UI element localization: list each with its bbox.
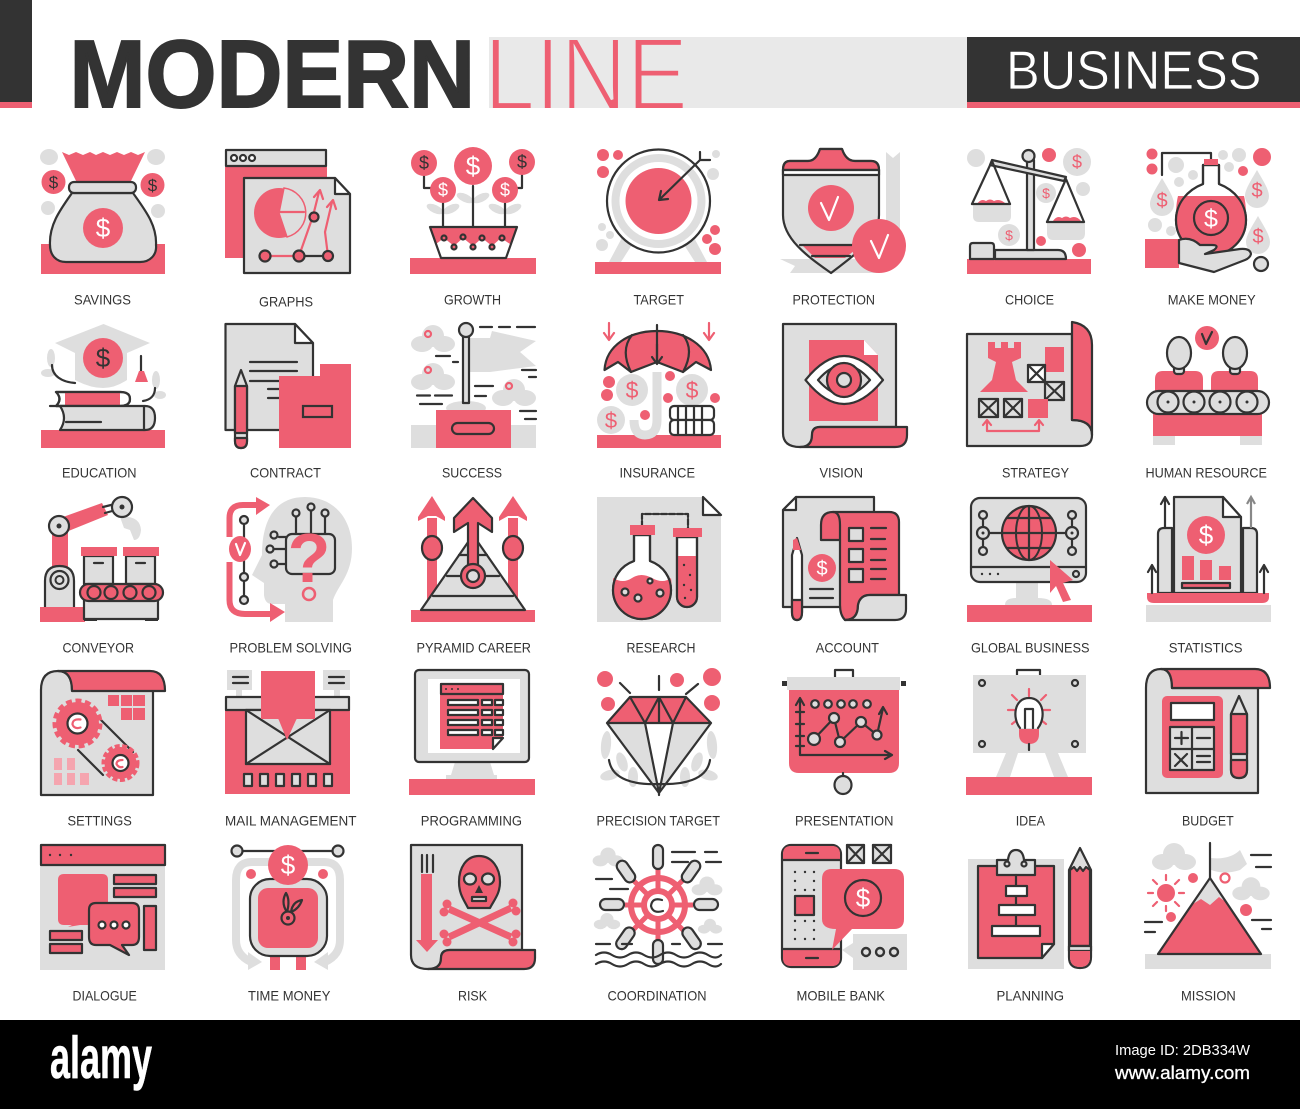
business tag: BUSINESS <box>1006 39 1262 101</box>
icon: phone with bubble: $ <box>856 883 871 913</box>
icon: flask with money: $ <box>1252 226 1264 248</box>
icon: money bag: $ <box>148 176 158 195</box>
icon: ledger and scroll <box>783 497 906 620</box>
icon: report with arrows: $ <box>1199 520 1214 550</box>
icon: umbrella and coins <box>597 323 721 448</box>
icon: umbrella and coins: $ <box>605 408 617 433</box>
icon: flask with money: $ <box>1156 190 1168 212</box>
panel: growth <box>410 147 536 307</box>
panel: human resource <box>1146 326 1269 480</box>
label: choice: CHOICE <box>1005 291 1054 307</box>
label: education: EDUCATION <box>62 464 136 480</box>
label: human resource: HUMAN RESOURCE <box>1146 464 1267 480</box>
icon: robot arm and conveyor <box>40 497 163 622</box>
icon: diamond <box>597 668 721 795</box>
icon: flag on box <box>411 323 536 448</box>
panel: mobile bank <box>782 845 907 1003</box>
label: growth: GROWTH <box>444 291 501 307</box>
label: account: ACCOUNT <box>816 639 879 655</box>
icon: flasks <box>597 497 721 622</box>
icon: report with arrows <box>1146 497 1271 622</box>
label: precision target: PRECISION TARGET <box>596 812 720 828</box>
label: mission: MISSION <box>1181 987 1236 1003</box>
icon: gears on scroll <box>41 671 165 795</box>
icon: clock with dollar: $ <box>281 850 296 880</box>
icon: head with question mark: ? <box>288 519 330 597</box>
icon: graduation cap on books <box>41 324 166 448</box>
panel: presentation <box>782 670 906 828</box>
panel: pyramid career <box>411 496 535 655</box>
icon: eye on scroll <box>783 324 907 447</box>
icon: mountain flag <box>1145 843 1271 969</box>
label: savings: SAVINGS <box>74 291 131 307</box>
icon: envelope <box>225 670 350 794</box>
label: programming: PROGRAMMING <box>421 812 522 828</box>
label: time money: TIME MONEY <box>248 987 331 1003</box>
icon: monitor with code sheet <box>409 670 535 795</box>
panel: target <box>595 149 721 307</box>
title: modern: MODERN <box>70 21 475 128</box>
panel: coordination <box>593 845 722 1003</box>
icon: ledger and scroll: $ <box>816 558 828 580</box>
icon: balance scales <box>967 148 1091 274</box>
label: strategy: STRATEGY <box>1002 464 1070 480</box>
panel: contract <box>226 324 351 480</box>
title: line: LINE <box>484 16 688 132</box>
icon: chess map <box>967 322 1092 446</box>
icon: phone with bubble <box>782 845 907 970</box>
icon: light bulb board <box>966 670 1092 795</box>
icon: money plant: $ <box>500 180 510 200</box>
panel: mail management <box>225 670 357 828</box>
icon: umbrella and coins: $ <box>686 377 699 403</box>
label: pyramid career: PYRAMID CAREER <box>416 639 531 655</box>
panel: savings <box>40 149 165 307</box>
panel: research <box>597 497 721 655</box>
panel: mission <box>1145 843 1271 1003</box>
panel: budget <box>1146 669 1270 828</box>
label: mobile bank: MOBILE BANK <box>796 987 886 1003</box>
panel: choice <box>967 148 1091 307</box>
icon: flask with money: $ <box>1251 180 1263 202</box>
label: insurance: INSURANCE <box>620 464 695 480</box>
icon: clipboard and pencil <box>968 848 1091 969</box>
panel: strategy <box>967 322 1092 480</box>
panel: graphs <box>225 150 350 309</box>
icon: money plant: $ <box>419 153 429 173</box>
icon: ship wheel <box>593 845 722 966</box>
panel: vision <box>783 324 907 480</box>
icon: money bag <box>40 149 165 274</box>
icon: umbrella and coins: $ <box>626 377 639 403</box>
panel: planning <box>968 848 1091 1003</box>
icon: head with question mark <box>229 497 352 622</box>
panel: time money <box>232 845 344 1003</box>
label: target: TARGET <box>634 291 684 307</box>
panel: precision target <box>596 668 721 828</box>
icon: people on conveyor <box>1147 326 1269 445</box>
panel: problem solving <box>229 497 352 655</box>
icon: money plant: $ <box>517 152 527 172</box>
icon: archery target <box>595 149 721 274</box>
panel: dialogue <box>40 845 165 1003</box>
icon: chat window <box>40 845 165 970</box>
footer image id: Image ID: 2DB334W <box>1115 1042 1251 1059</box>
icon: money plant: $ <box>438 180 448 200</box>
label: presentation: PRESENTATION <box>795 812 893 828</box>
icon: skull warning <box>411 845 535 969</box>
label: protection: PROTECTION <box>792 291 875 307</box>
header banner <box>0 0 1300 109</box>
panel: account <box>783 497 906 655</box>
label: mail management: MAIL MANAGEMENT <box>225 812 357 828</box>
icon: money plant: $ <box>466 151 481 181</box>
icon: money bag: $ <box>96 213 111 243</box>
icon: shield <box>780 149 906 273</box>
icon: clock with dollar <box>232 845 344 970</box>
icon: balance scales: $ <box>1005 227 1013 243</box>
label: conveyor: CONVEYOR <box>62 639 134 655</box>
icon: projector screen <box>782 670 906 794</box>
panel: global business <box>967 498 1092 655</box>
left header block <box>0 0 32 108</box>
label: planning: PLANNING <box>996 987 1064 1003</box>
panel: idea <box>966 670 1092 828</box>
label: global business: GLOBAL BUSINESS <box>971 639 1090 655</box>
footer bar <box>0 1020 1300 1109</box>
panel: insurance <box>597 323 721 480</box>
panel: conveyor <box>40 497 163 655</box>
label: settings: SETTINGS <box>68 812 132 828</box>
icon: globe monitor <box>967 498 1092 622</box>
label: idea: IDEA <box>1016 812 1046 828</box>
label: dialogue: DIALOGUE <box>72 987 137 1003</box>
icon: balance scales: $ <box>1072 152 1082 172</box>
panel: statistics <box>1146 497 1271 655</box>
label: vision: VISION <box>820 464 863 480</box>
panel: education <box>41 324 166 480</box>
label: success: SUCCESS <box>442 464 502 480</box>
icon: balance scales: $ <box>1042 185 1050 201</box>
panel: risk <box>411 845 535 1003</box>
icon: money bag: $ <box>49 173 59 192</box>
footer url: www.alamy.com <box>1114 1063 1250 1083</box>
label: contract: CONTRACT <box>250 464 321 480</box>
label: problem solving: PROBLEM SOLVING <box>230 639 352 655</box>
panel: success <box>411 323 536 480</box>
icon: money plant <box>410 147 536 274</box>
label: statistics: STATISTICS <box>1169 639 1242 655</box>
icon: flask with money: $ <box>1204 205 1218 233</box>
panel: protection <box>780 149 906 307</box>
panel: settings <box>41 671 165 828</box>
icon: graduation cap on books: $ <box>96 343 111 373</box>
panel: programming <box>409 670 535 828</box>
icon: pyramid with arrows <box>411 496 535 622</box>
panel: make money <box>1145 148 1271 307</box>
label: coordination: COORDINATION <box>608 987 706 1003</box>
icon: calculator on scroll <box>1146 669 1270 793</box>
footer logo: alamy: alamy <box>50 1025 152 1091</box>
label: risk: RISK <box>458 987 488 1003</box>
grey header band <box>489 37 967 108</box>
label: budget: BUDGET <box>1182 812 1234 828</box>
icon: charts on document <box>225 150 350 273</box>
label: graphs: GRAPHS <box>259 293 313 309</box>
icon: flask with money <box>1145 148 1271 272</box>
label: make money: MAKE MONEY <box>1168 291 1256 307</box>
icon: document and folder <box>226 324 351 448</box>
label: research: RESEARCH <box>626 639 696 655</box>
